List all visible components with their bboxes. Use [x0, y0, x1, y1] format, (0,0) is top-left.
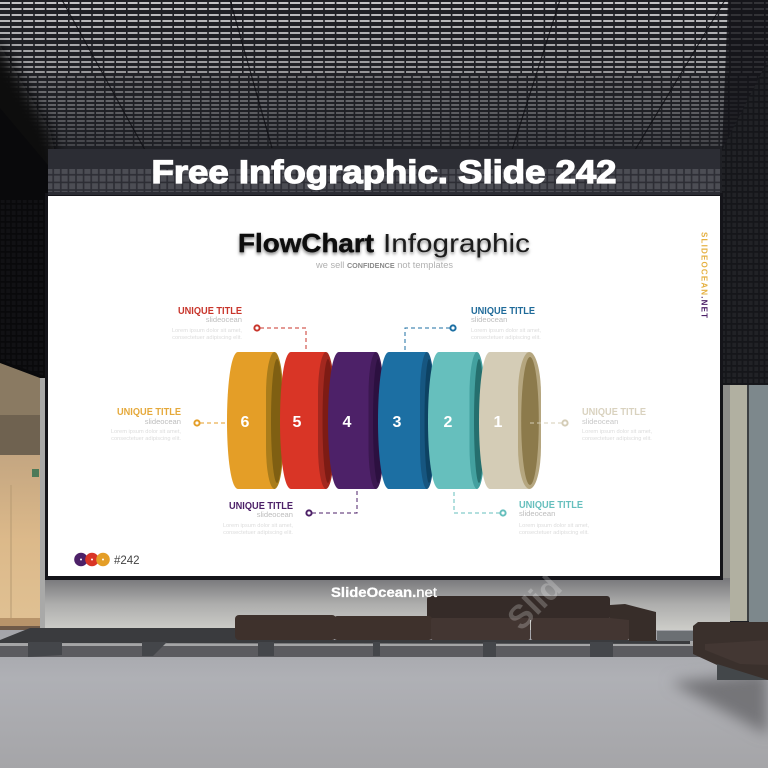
ring 4: 4	[343, 414, 352, 431]
right wall	[722, 0, 768, 390]
label: step 4: consectetuer adipiscing elit.	[223, 530, 293, 536]
slide number: #242	[114, 555, 140, 567]
connector: step 2	[454, 490, 506, 516]
left wall	[0, 108, 48, 382]
label: step 2: UNIQUE TITLE	[519, 499, 583, 511]
ring 3	[378, 352, 434, 489]
label: step 4: UNIQUE TITLE	[229, 500, 293, 512]
label: step 4	[223, 500, 293, 536]
label: step 6: consectetuer adipiscing elit.	[111, 436, 181, 442]
label: step 2	[519, 499, 590, 536]
top band above screen	[48, 149, 720, 195]
column at right	[722, 385, 768, 625]
wall below screen	[45, 578, 730, 630]
label: step 1: consectetuer adipiscing elit.	[582, 436, 652, 442]
label: step 3: Lorem ipsum dolor sit amet,	[471, 328, 542, 334]
screen frame	[45, 193, 723, 580]
ceiling grid	[0, 0, 768, 200]
label: step 1	[582, 406, 653, 442]
ring 6: 6	[241, 414, 250, 431]
label: step 6: Lorem ipsum dolor sit amet,	[111, 429, 181, 435]
label: step 1: slideocean	[582, 417, 618, 426]
label: step 5: Lorem ipsum dolor sit amet,	[172, 328, 242, 334]
label: step 4: slideocean	[257, 510, 293, 519]
bench and sofa	[0, 596, 700, 657]
lobby at left	[0, 363, 48, 632]
label: step 3: UNIQUE TITLE	[471, 305, 535, 317]
label: step 6: UNIQUE TITLE	[117, 406, 181, 418]
label: step 5: consectetuer adipiscing elit.	[172, 335, 242, 341]
label: step 2: Lorem ipsum dolor sit amet,	[519, 523, 590, 529]
watermark: Slid	[500, 568, 569, 637]
brand caption: SlideOcean. net	[331, 585, 437, 600]
ring 4	[328, 352, 384, 489]
ring 1	[479, 352, 541, 489]
label: step 5: slideocean	[206, 315, 242, 324]
label: step 1: UNIQUE TITLE	[582, 406, 646, 418]
floor	[0, 630, 768, 768]
right sofa	[693, 622, 768, 680]
connector: step 5	[254, 325, 306, 352]
main title: Free Infographic. Slide 242	[152, 154, 616, 190]
slide heading: Infographic	[383, 228, 530, 258]
label: step 6	[111, 406, 181, 442]
label: step 5: UNIQUE TITLE	[178, 305, 242, 317]
label: step 1: Lorem ipsum dolor sit amet,	[582, 429, 653, 435]
label: step 5	[172, 305, 242, 341]
ring 3: 3	[393, 414, 402, 431]
label: step 3: slideocean	[471, 315, 507, 324]
footer icon: three discs	[74, 553, 110, 566]
slide subtitle: we sell CONFIDENCE not templates	[315, 260, 454, 270]
connector: step 3	[405, 325, 456, 352]
label: step 4: Lorem ipsum dolor sit amet,	[223, 523, 293, 529]
ring 5: 5	[293, 414, 302, 431]
vertical brand text: SLIDEOCEAN .NET	[700, 232, 708, 318]
label: step 2: consectetuer adipiscing elit.	[519, 530, 589, 536]
ring 2	[428, 352, 484, 489]
white slide	[48, 196, 720, 576]
ring 6	[227, 352, 283, 489]
connector: step 4	[306, 490, 357, 516]
slide heading: FlowChart	[238, 228, 374, 258]
connector: step 1	[530, 420, 568, 426]
label: step 3	[471, 305, 542, 341]
ring 1: 1	[494, 414, 503, 431]
label: step 3: consectetuer adipiscing elit.	[471, 335, 541, 341]
slide heading	[238, 228, 530, 258]
ring 5	[280, 352, 334, 489]
label: step 2: slideocean	[519, 509, 555, 518]
label: step 6: slideocean	[145, 417, 181, 426]
connector: step 6	[194, 420, 227, 426]
ring 2: 2	[444, 414, 453, 431]
